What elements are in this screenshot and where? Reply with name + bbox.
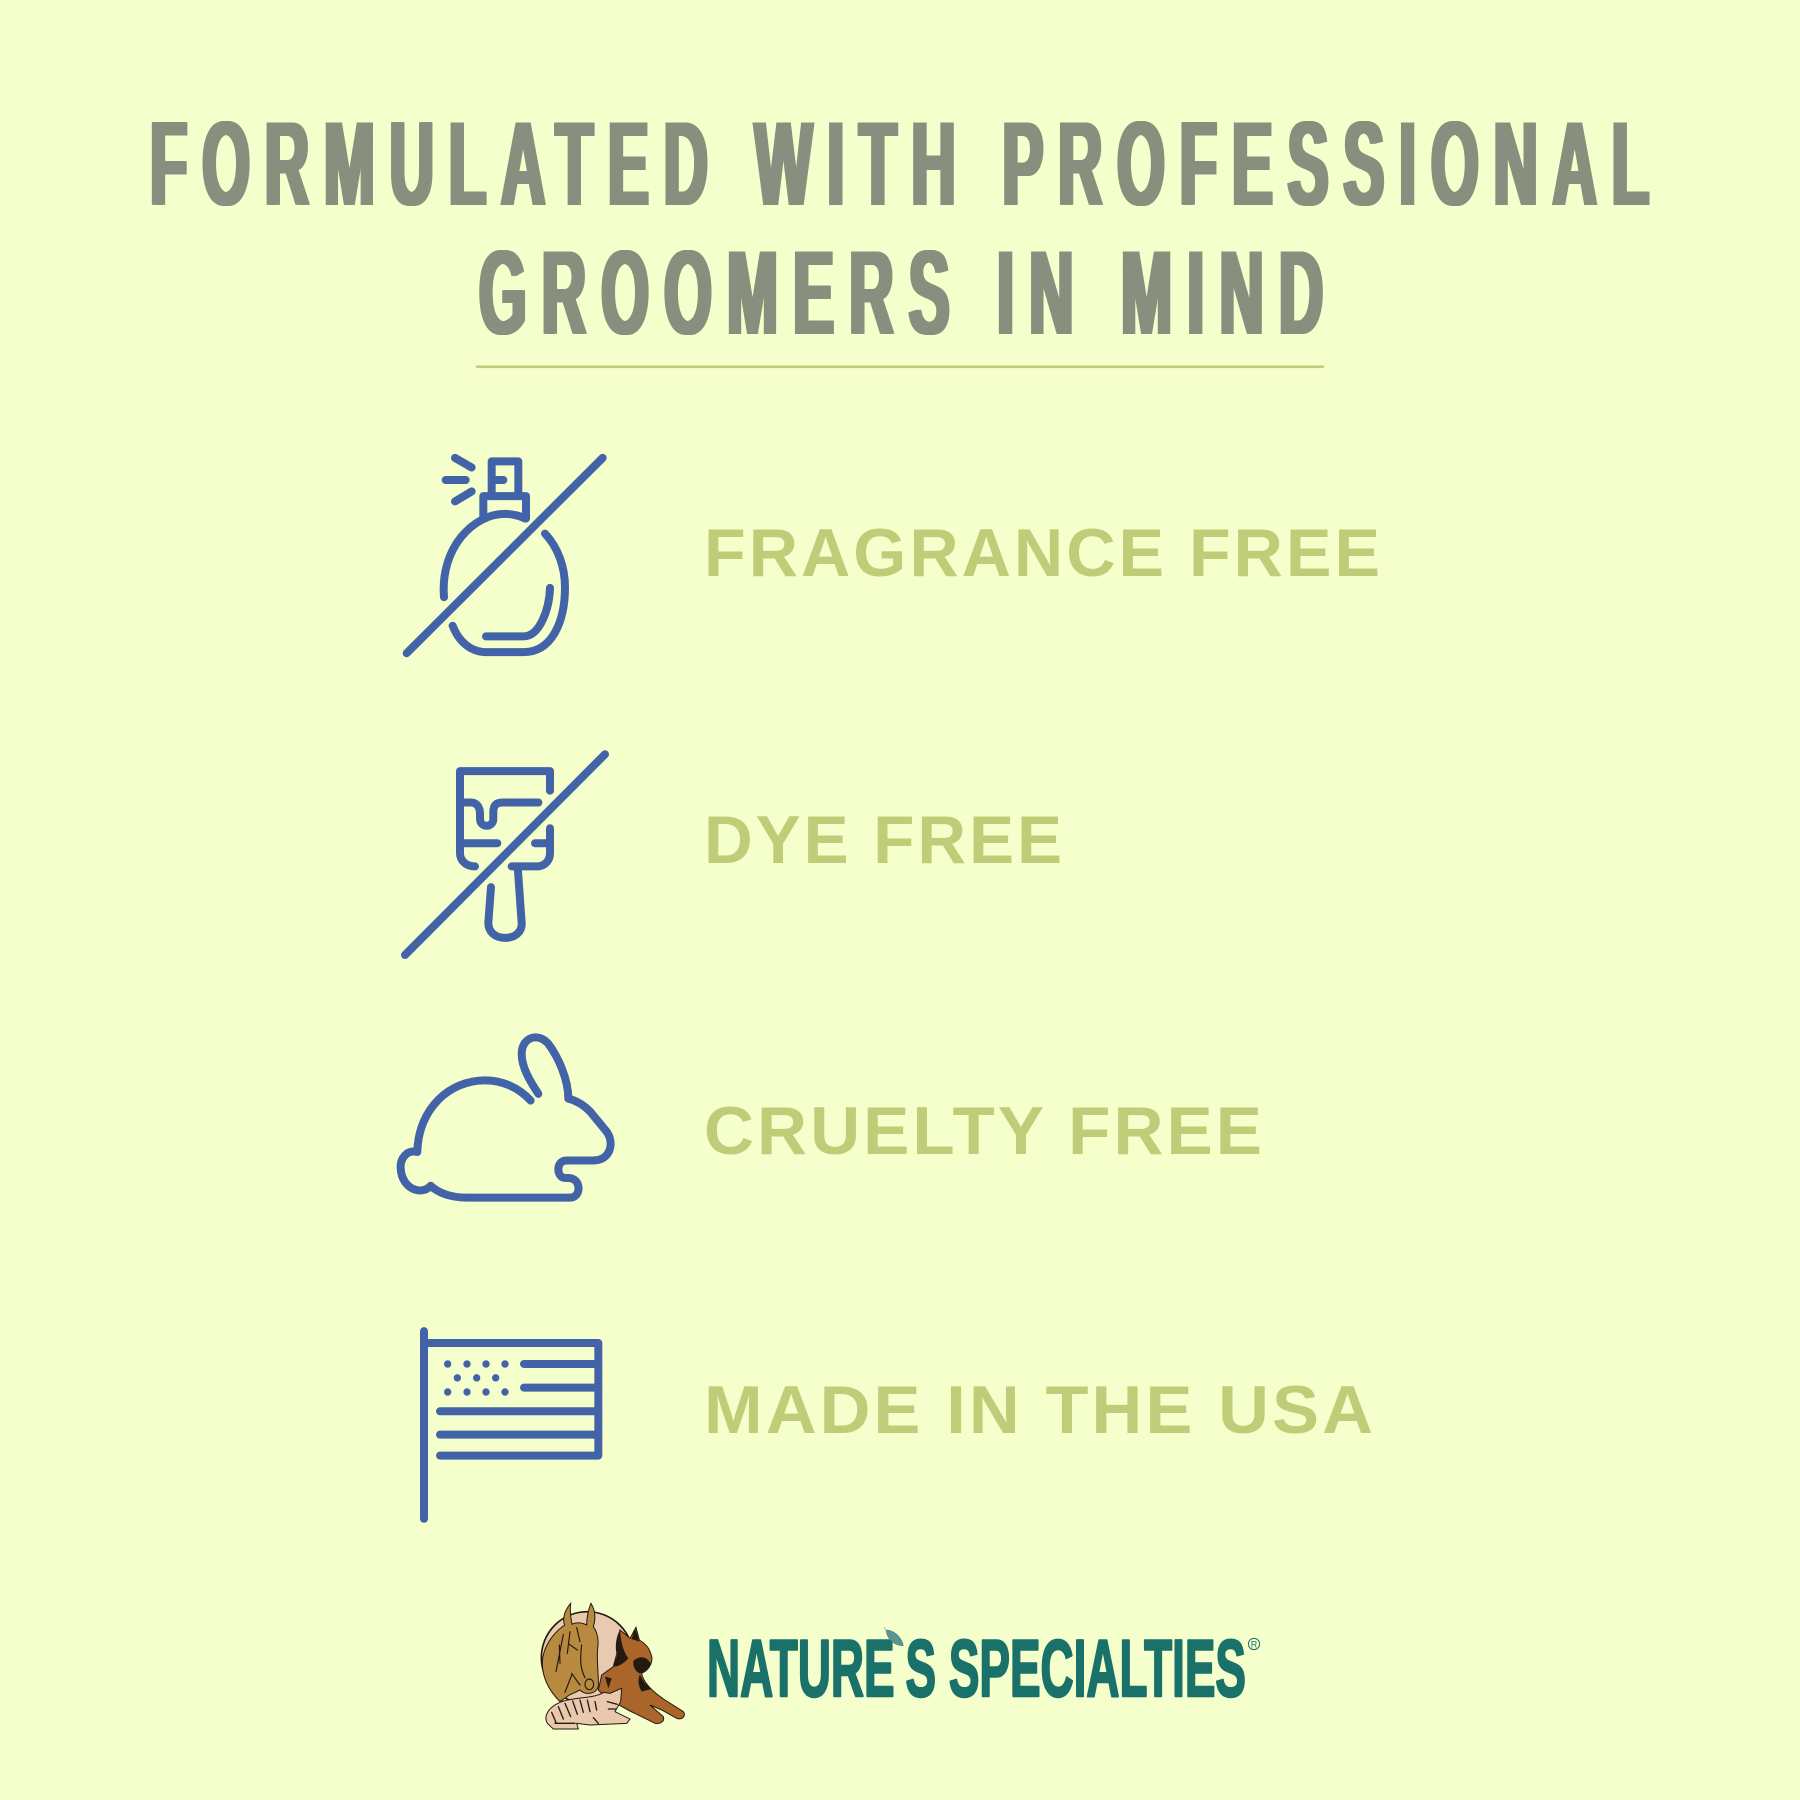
flag stars	[444, 1360, 509, 1396]
sun circle	[541, 1612, 633, 1704]
title	[150, 97, 1664, 360]
logo leaf	[884, 1628, 903, 1646]
label: dye free: DYE FREE	[704, 802, 1065, 878]
title line 1: FORMULATED WITH PROFESSIONAL	[150, 97, 1664, 231]
registered mark: R	[1251, 1640, 1258, 1650]
icon: crossed-out paint brush	[405, 754, 605, 955]
flag outline and stripes	[424, 1331, 598, 1519]
logo	[541, 1603, 1260, 1729]
label: fragrance free: FRAGRANCE FREE	[704, 515, 1383, 591]
horse markings	[556, 1628, 585, 1692]
icon: crossed-out perfume bottle	[407, 458, 603, 653]
horse muzzle	[585, 1679, 594, 1690]
row: made in the usa	[424, 1331, 1376, 1519]
icon: american flag	[424, 1331, 598, 1519]
cat	[546, 1688, 630, 1729]
row: cruelty free	[401, 1037, 1265, 1198]
logo wordmark: NATURE'S SPECIALTIES	[707, 1624, 1246, 1714]
row: dye free	[405, 754, 1065, 955]
dog markings	[605, 1628, 652, 1692]
label: made in the usa: MADE IN THE USA	[704, 1372, 1376, 1448]
label: cruelty free: CRUELTY FREE	[704, 1093, 1265, 1169]
registered mark	[1248, 1638, 1260, 1650]
icon: rabbit	[401, 1037, 611, 1198]
horse	[542, 1603, 598, 1702]
logo emblem: horse, dog and cat	[541, 1603, 684, 1729]
row: fragrance free	[407, 458, 1383, 653]
title line 2: GROOMERS IN MIND	[479, 226, 1338, 360]
cat stripes	[552, 1700, 617, 1723]
dog	[598, 1627, 684, 1724]
